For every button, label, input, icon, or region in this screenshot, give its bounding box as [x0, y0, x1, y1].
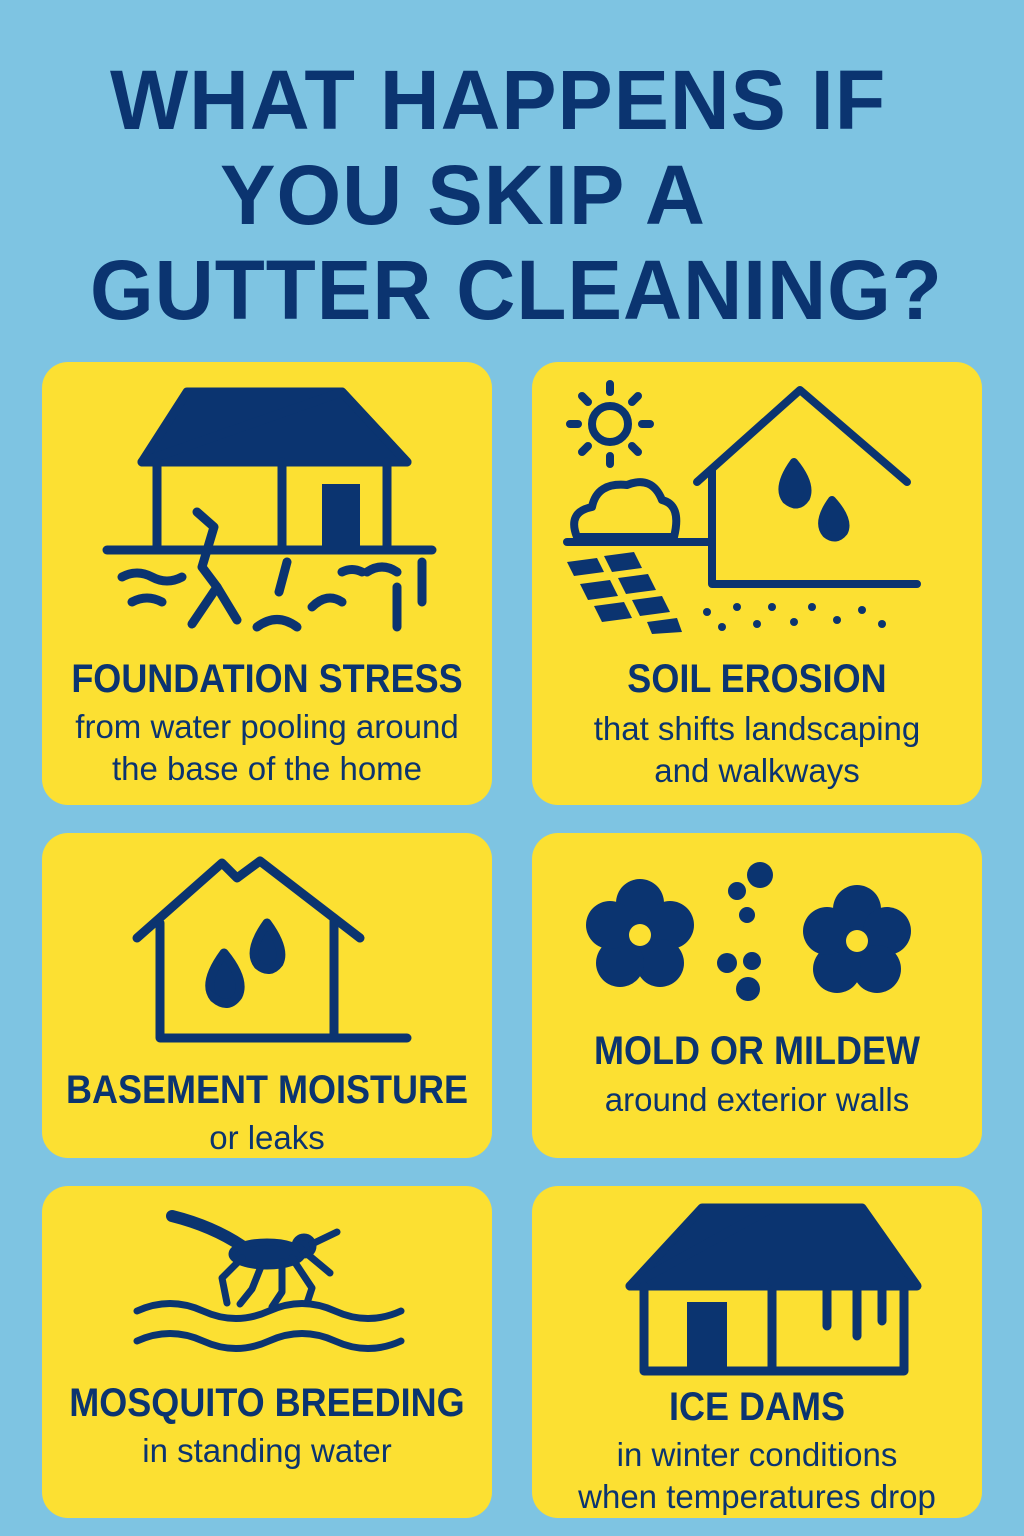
panel: ice dams: [532, 1186, 982, 1518]
icon: cracked foundation house: [102, 388, 436, 632]
icon: mosquito over water: [134, 1210, 404, 1352]
panel: mold or mildew: [532, 833, 982, 1158]
text: around exterior walls: [605, 1081, 909, 1118]
panel: soil erosion: [532, 362, 982, 805]
text: [75, 708, 459, 787]
panel: basement moisture: BASEMENT MOISTURE: [66, 1068, 468, 1112]
text: in standing water: [142, 1432, 392, 1469]
text: [594, 710, 920, 789]
title: [90, 53, 943, 337]
title: WHAT HAPPENS IF: [110, 53, 886, 147]
panel: soil erosion: SOIL EROSION: [627, 657, 887, 701]
panel: mosquito breeding: MOSQUITO BREEDING: [69, 1381, 465, 1425]
text: from water pooling around: [75, 708, 459, 745]
title: YOU SKIP A: [220, 148, 706, 242]
text: or leaks: [209, 1119, 325, 1156]
panel: mold or mildew: MOLD OR MILDEW: [594, 1029, 920, 1073]
text: that shifts landscaping: [594, 710, 920, 747]
title: GUTTER CLEANING?: [90, 243, 943, 337]
panel: foundation stress: [42, 362, 492, 805]
panel: basement moisture: [42, 833, 492, 1158]
panel: mosquito breeding: [42, 1186, 492, 1518]
heading: FOUNDATION STRESS: [71, 657, 463, 701]
icon: sun, bush, house with drops, eroding soil: [563, 380, 921, 634]
text: when temperatures drop: [578, 1478, 936, 1515]
icon: mold spores: [586, 862, 911, 1001]
text: and walkways: [654, 752, 860, 789]
text: the base of the home: [112, 750, 422, 787]
panel: ice dams: ICE DAMS: [669, 1385, 845, 1429]
text: [578, 1436, 936, 1515]
icon: house with water drops: [132, 856, 412, 1042]
text: in winter conditions: [617, 1436, 897, 1473]
icon: house with icicles: [626, 1204, 922, 1376]
